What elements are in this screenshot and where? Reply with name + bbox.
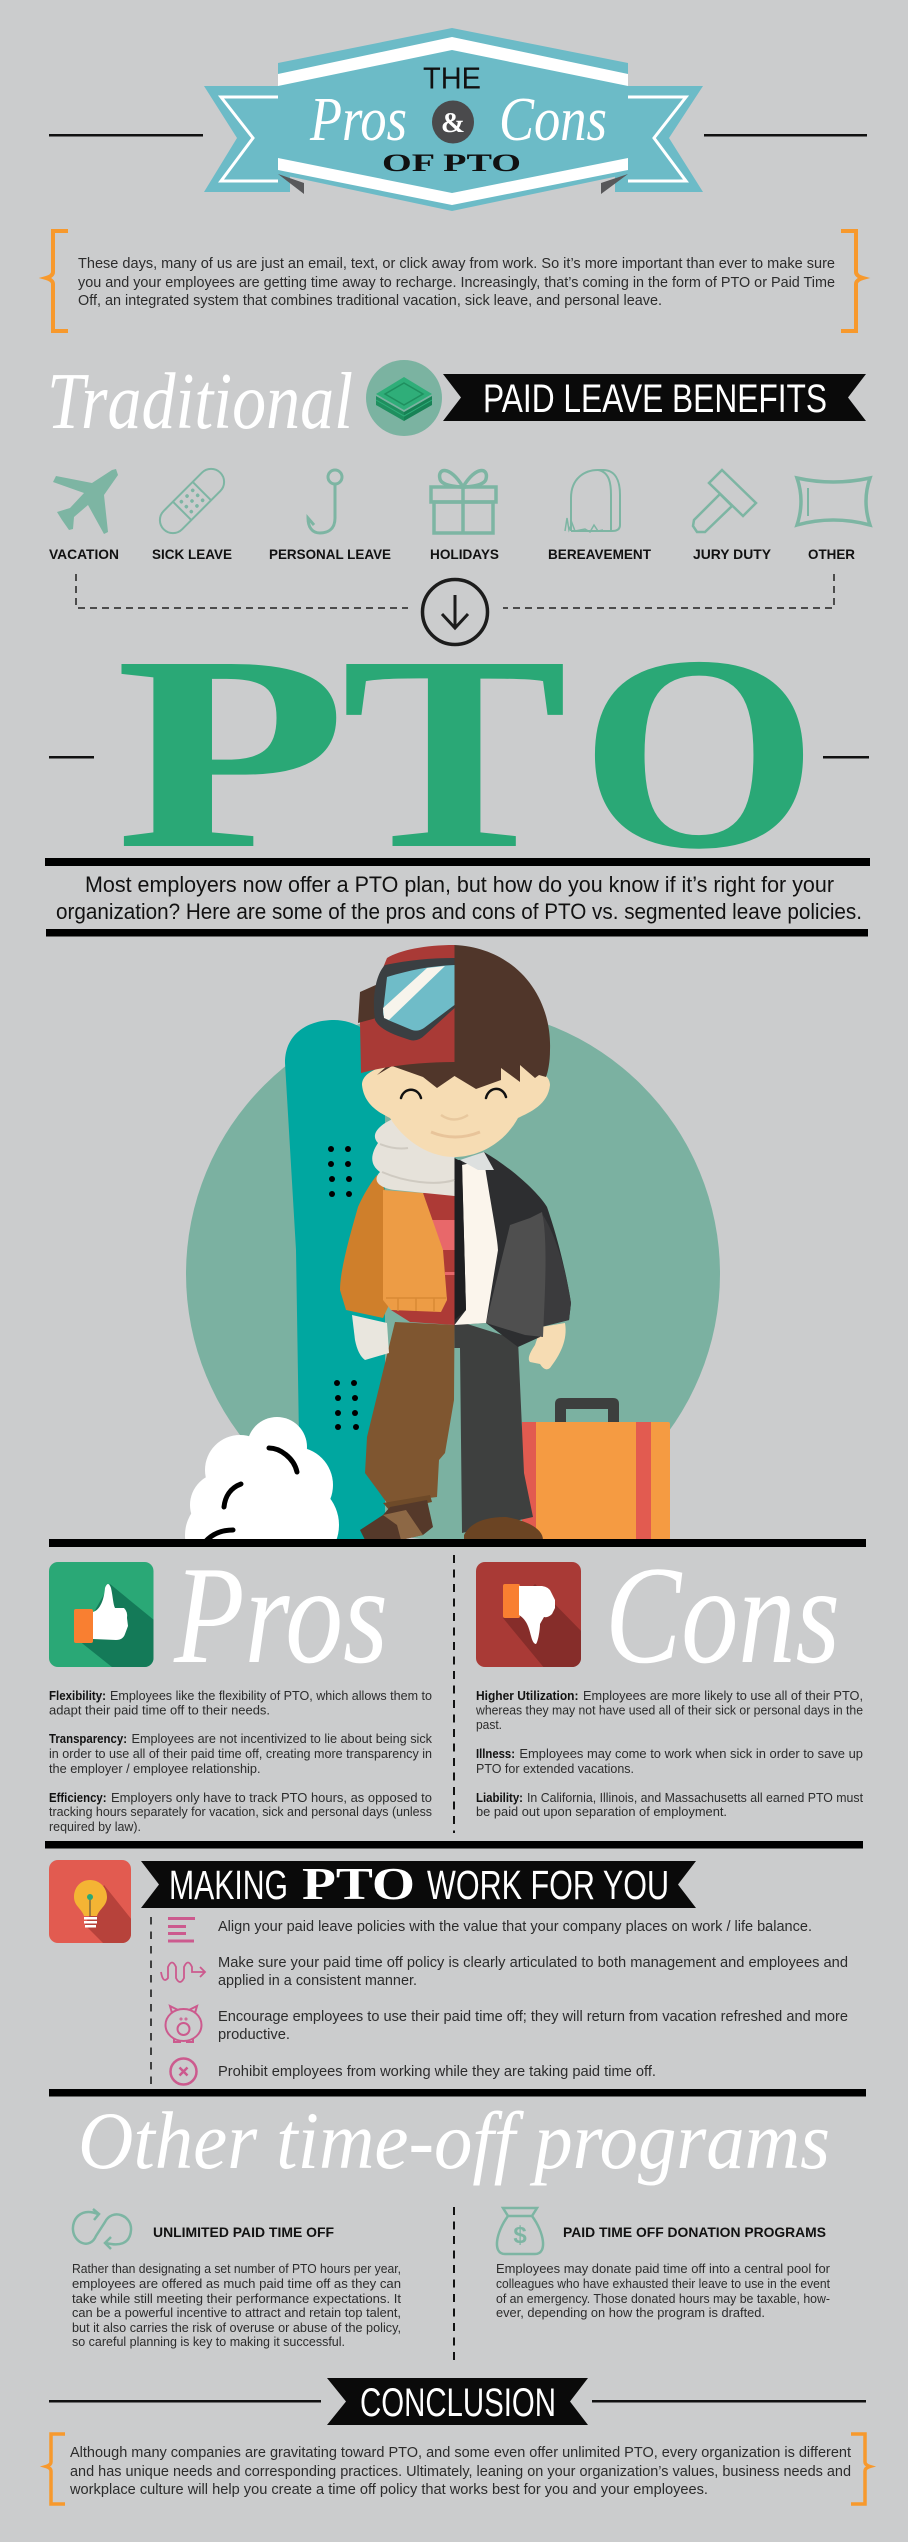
bar [49,2089,866,2096]
icon: infinity loop [73,2209,131,2249]
text: flexibility [49,1689,432,1718]
jacket left [340,1175,454,1325]
heading: pros: Pros [173,1538,388,1693]
text: Rather than designating a set number of PTO hours per year, [72,2262,401,2276]
text: higher utilization: Employees are more likely to use all of their PTO, [583,1689,863,1703]
text: transparency: the employer / employee relationship. [49,1762,260,1776]
panel: pros [49,1538,433,1834]
benefit labels [49,546,855,562]
text: encourage: productive. [218,2027,290,2043]
icon: align bars [168,1917,195,1942]
text: liability: In California, Illinois, and Massachusetts all earned PTO must [527,1791,864,1805]
illustration: snowboarder and traveller [185,945,720,1575]
text: efficiency: required by law). [49,1820,141,1834]
text: encourage [218,2009,848,2043]
benefit labels: HOLIDAYS [430,546,499,562]
heading: traditional: Traditional [47,358,353,446]
text: liability [476,1791,864,1819]
divider [453,1555,455,1833]
panel: unlimited paid time off [72,2209,402,2349]
trousers [365,1320,533,1533]
title ribbon: Pros [309,86,407,154]
question text between bars: organization? Here are some of the pros and cons of PTO vs. segmented leave policies. [56,899,862,924]
conclusion text with orange brackets: workplace culture will help you create a time off policy that works best for you and your employees. [69,2482,708,2498]
title ribbon: & [441,107,465,139]
text: illness: PTO for extended vacations. [476,1762,634,1776]
text: encourage: Encourage employees to use their paid time off; they will return from vacation refreshed and more [218,2009,848,2025]
goggles [358,958,454,1040]
hat [360,945,454,1073]
icon: fish hook [308,470,342,533]
backdrop circle [186,1007,720,1541]
intro text with orange brackets: These days, many of us are just an email, text, or click away from work. So it’s more important than ever to make sure [78,256,835,272]
title ribbon: OF PTO [382,150,521,177]
heading: UNLIMITED PAID TIME OFF [153,2224,334,2240]
panel: donation programs [496,2208,831,2320]
text: higher utilization [475,1689,863,1732]
text: articulate: Make sure your paid time off policy is clearly articulated to both management and employees and [218,1955,848,1971]
snow cloud [185,1417,339,1539]
icon: x circle [170,2058,196,2084]
text: liability: be paid out upon separation of employment. [476,1805,727,1819]
hair [377,945,550,1089]
text: take while still meeting their performance expectations. It [72,2292,402,2306]
icon: thumbs up [49,1562,154,1667]
text: transparency [49,1732,433,1776]
panel: cons [475,1538,864,1819]
face [362,1060,550,1157]
banner: paid leave benefits: PAID LEAVE BENEFITS [483,377,827,421]
question text between bars [45,858,870,936]
text: articulate: applied in a consistent manner. [218,1973,417,1989]
text: transparency: Employees are not incentivized to lie about being sick [132,1732,433,1746]
banner: making PTO work for you: WORK FOR YOU [427,1862,669,1908]
text: so careful planning is key to making it successful. [72,2335,345,2349]
icon: bandage [155,464,229,538]
text: colleagues who have exhausted their leave to use in the event [496,2277,831,2291]
banner: making PTO work for you [141,1859,696,1909]
glove and hand [352,1315,566,1369]
text: Employees may donate paid time off into a central pool for [496,2262,830,2276]
intro text with orange brackets [46,231,863,331]
text: transparency: Transparency: [49,1732,127,1746]
heading: PTO: T [341,599,568,907]
text: but it also carries the risk of overuse or abuse of the policy, [72,2321,401,2335]
benefit labels: PERSONAL LEAVE [269,546,391,562]
text: of an emergency. Those donated hours may be taxable, how- [496,2292,830,2306]
text: liability: Liability: [476,1791,523,1805]
text: flexibility: Employees like the flexibility of PTO, which allows them to [110,1689,432,1703]
tips list [151,1917,848,2085]
text: illness [476,1747,863,1776]
title ribbon: Cons [499,86,607,154]
title ribbon: THE [423,60,481,96]
text: higher utilization: whereas they may not have used all of their sick or personal days in the [475,1704,863,1718]
text: higher utilization: Higher Utilization: [476,1689,578,1703]
heading: PTO: O [580,599,818,907]
benefit labels: BEREAVEMENT [548,546,651,562]
divider [453,2207,455,2365]
arrow: down circle [422,580,488,644]
text [496,2262,831,2320]
text: can be a powerful incentive to attract and retain top talent, [72,2306,401,2320]
text: efficiency: tracking hours separately for vacation, sick and personal days (unless [49,1805,432,1819]
text [72,2262,402,2349]
icon: light bulb [49,1860,131,1943]
title ribbon [49,28,867,211]
bar [45,1841,863,1848]
benefit labels: VACATION [49,546,119,562]
icon: pillow [797,478,870,525]
banner: making PTO work for you: MAKING [169,1862,288,1908]
intro text with orange brackets: you and your employees are getting time away to recharge. Increasingly, that’s coming in the form of PTO or Paid Time [78,275,835,291]
conclusion text with orange brackets: Although many companies are gravitating toward PTO, and some even offer unlimited PTO, every organization is different [70,2445,851,2461]
icon: gift [431,471,496,533]
text: flexibility: adapt their paid time off to their needs. [49,1704,270,1718]
heading: other time-off programs: Other time-off programs [78,2095,830,2186]
text: efficiency: Employers only have to track PTO hours, as opposed to [111,1791,432,1805]
text: illness: Illness: [476,1747,515,1761]
icon: money bag: $ [513,2222,527,2249]
heading: cons: Cons [605,1538,840,1693]
intro text with orange brackets: Off, an integrated system that combines traditional vacation, sick leave, and personal leave. [78,293,662,309]
icon: plane [53,469,118,534]
text: higher utilization: past. [476,1718,502,1732]
jacket right [454,1152,571,1347]
text: align: Align your paid leave policies with the value that your company places on work / life balance. [218,1919,812,1935]
icon: wavy arrow [161,1962,205,1982]
banner: making PTO work for you: PTO [302,1859,415,1909]
text: transparency: in order to use all of their paid time off, creating more transparency in [49,1747,432,1761]
icon: money bag [497,2208,543,2254]
heading: PTO: P [115,599,347,907]
heading: PTO [49,599,869,907]
icon: money stack [366,360,442,436]
icon: gravestone [565,470,620,532]
scarf [372,1118,454,1196]
heading: PAID TIME OFF DONATION PROGRAMS [563,2224,826,2240]
icon: thumbs down [476,1562,581,1667]
text: articulate [218,1955,848,1989]
banner: conclusion: CONCLUSION [360,2381,556,2425]
boots [360,1500,543,1540]
suitcase [522,1398,670,1540]
bar [49,1539,866,1547]
snowboard [285,1020,385,1540]
benefit labels: JURY DUTY [693,546,772,562]
dashed connector [76,574,834,608]
text: ever, depending on how the program is drafted. [496,2306,765,2320]
text: prohibit: Prohibit employees from working while they are taking paid time off. [218,2064,656,2080]
benefit labels: OTHER [808,546,855,562]
benefit labels: SICK LEAVE [152,546,232,562]
icon: piggy bank [166,2006,202,2042]
text: illness: Employees may come to work when sick in order to save up [519,1747,863,1761]
text: efficiency: Efficiency: [49,1791,106,1805]
conclusion text with orange brackets: and has unique needs and corresponding practices. Ultimately, leaning on your organization’s values, business needs and [70,2464,851,2480]
text: efficiency [49,1791,432,1834]
text: flexibility: Flexibility: [49,1689,106,1703]
banner: conclusion [49,2378,866,2425]
question text between bars: Most employers now offer a PTO plan, but how do you know if it’s right for your [85,872,834,897]
icon: gavel [693,470,756,532]
text: employees are offered as much paid time off as they can [72,2277,401,2291]
conclusion text with orange brackets [46,2434,870,2504]
